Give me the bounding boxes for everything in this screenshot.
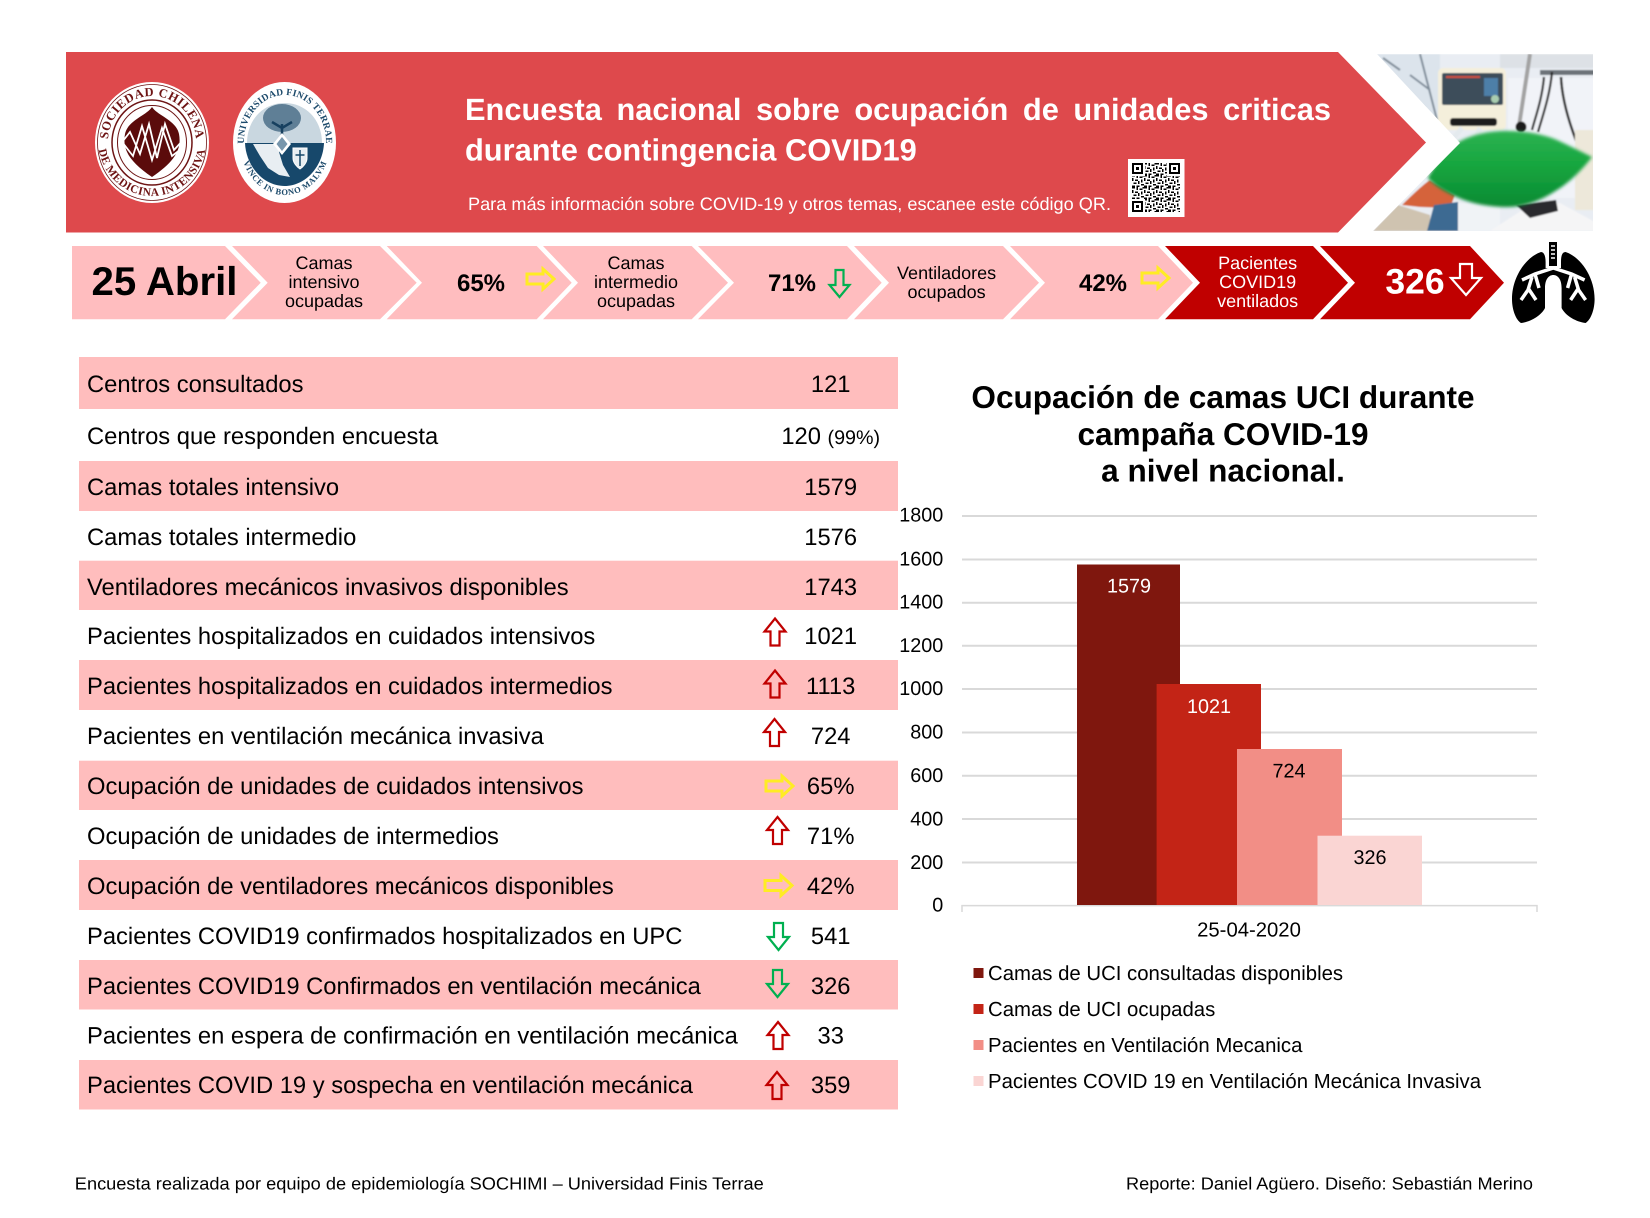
chart title (971, 379, 1475, 488)
chevron: camas intensivo label (232, 246, 417, 319)
row: Ventiladores disponibles (79, 561, 898, 610)
y axis labels: 1600 (899, 548, 943, 570)
chevron: camas intermedio label: Camas (607, 253, 665, 273)
chevron: camas intensivo label: intensivo (288, 272, 360, 292)
row: Camas totales intensivo: 1579 (804, 474, 857, 501)
y axis labels: 1000 (899, 678, 943, 700)
row: Camas totales intermedio: Camas totales intermedio (87, 524, 356, 551)
chevron: ventiladores label (854, 246, 1039, 319)
chevron: camas intensivo label: Camas (295, 253, 353, 273)
row: hospitalizados intermedios (79, 660, 898, 710)
row: ventilación mecánica invasiva: 724 (811, 723, 851, 750)
logo: Sociedad Chilena de Medicina Intensiva: DE MEDICINA INTENSIVA (98, 148, 206, 196)
logo: Sociedad Chilena de Medicina Intensiva: SOCIEDAD CHILENA (100, 88, 204, 139)
row: COVID 19 y sospecha (79, 1060, 898, 1110)
chevron: 65% (387, 246, 572, 319)
footer left credit: Encuesta realizada por equipo de epidemiología SOCHIMI – Universidad Finis Terrae (75, 1174, 764, 1194)
chevron: camas intensivo label: ocupadas (285, 291, 363, 311)
row: Centros que responden encuesta (87, 423, 880, 450)
row: COVID 19 y sospecha: 359 (811, 1072, 851, 1099)
x axis label: 25-04-2020 (1197, 920, 1301, 942)
green bag (1428, 131, 1592, 207)
row: COVID19 ventilación mecánica: 326 (811, 973, 851, 1000)
y axis labels: 600 (910, 765, 943, 787)
header subtitle: Para más información sobre COVID-19 y otros temas, escanee este código QR. (468, 194, 1111, 214)
chart title: campaña COVID-19 (1077, 416, 1369, 452)
bar: COVID 19 ventilación 326: 326 (1353, 847, 1387, 869)
legend item: camas consultadas: Camas de UCI consultadas disponibles (988, 963, 1343, 985)
row: Ventiladores disponibles: Ventiladores mecánicos invasivos disponibles (87, 574, 569, 601)
chart title: Ocupación de camas UCI durante (971, 379, 1475, 415)
row: COVID19 ventilación mecánica (79, 960, 898, 1010)
row: ocupación ventiladores: 42% (807, 873, 854, 900)
y axis labels: 1200 (899, 635, 943, 657)
row: ocupación cuidados intensivos: Ocupación de unidades de cuidados intensivos (87, 773, 584, 800)
row: Centros que responden encuesta: 120 (99%) (781, 423, 880, 450)
chevron: 71%: 71% (768, 270, 816, 297)
chevron: camas intermedio label (543, 246, 728, 319)
chevron: ventiladores label: ocupados (908, 282, 986, 302)
data table (79, 357, 898, 1110)
chevron: pacientes ventilados label: ventilados (1217, 291, 1298, 311)
row: Centros que responden encuesta: Centros que responden encuesta (87, 423, 439, 450)
bar: pacientes en ventilación 724 (1237, 749, 1342, 905)
bar: camas UCI ocupadas 1021: 1021 (1187, 696, 1231, 718)
header title (465, 92, 1331, 168)
row: ocupación ventiladores (79, 860, 898, 910)
chevron: 42%: 42% (1079, 270, 1127, 297)
row: en espera de confirmación: 33 (817, 1022, 844, 1050)
icon: lungs (1512, 242, 1595, 323)
row: hospitalizados intensivos: Pacientes hospitalizados en cuidados intensivos (87, 623, 595, 650)
QR code (1128, 159, 1184, 217)
legend item: camas ocupadas: Camas de UCI ocupadas (988, 999, 1215, 1021)
y axis labels: 800 (910, 722, 943, 744)
row: hospitalizados intensivos (87, 618, 857, 650)
y axis labels: 200 (910, 852, 943, 874)
row: ocupación cuidados intensivos: 65% (807, 773, 854, 800)
logo: Universidad Finis Terrae: VINCE IN BONO MALVM (244, 160, 326, 196)
logo: Universidad Finis Terrae: UNIVERSIDAD FINIS TERRAE (238, 88, 332, 144)
chevron: 326 (1320, 246, 1504, 319)
chevron: 71% (698, 246, 882, 319)
row: ventilación mecánica invasiva: Pacientes en ventilación mecánica invasiva (87, 723, 545, 750)
row: Centros consultados (79, 357, 898, 409)
chevron: pacientes ventilados label (1165, 246, 1348, 319)
y axis labels: 1400 (899, 592, 943, 614)
row: COVID19 hospitalizados UPC: 541 (811, 923, 851, 950)
chart title: a nivel nacional. (1101, 452, 1345, 488)
row: hospitalizados intermedios: 1113 (806, 673, 855, 700)
row: ocupación intermedios (87, 817, 854, 850)
y axis labels: 0 (932, 894, 943, 916)
row: COVID 19 y sospecha: Pacientes COVID 19 y sospecha en ventilación mecánica (87, 1072, 694, 1099)
chevron: 65%: 65% (457, 270, 505, 297)
bar: camas UCI disponibles 1579 (1077, 564, 1180, 905)
chart legend (974, 963, 1482, 1093)
header title: Encuesta nacional sobre ocupación de unidades criticas (465, 92, 1331, 127)
chevron: 326: 326 (1385, 262, 1445, 302)
row: Camas totales intensivo: Camas totales intensivo (87, 474, 339, 501)
row: Camas totales intermedio (87, 524, 857, 551)
row: ocupación intermedios: 71% (807, 823, 854, 850)
row: hospitalizados intensivos: 1021 (804, 623, 857, 650)
legend item: COVID 19 ventilación invasiva: Pacientes COVID 19 en Ventilación Mecánica Invasiva (988, 1071, 1482, 1093)
row: COVID19 ventilación mecánica: Pacientes COVID19 Confirmados en ventilación mecánica (87, 973, 702, 1000)
y axis labels (899, 504, 943, 916)
chevron: date (72, 246, 261, 319)
chevron: pacientes ventilados label: Pacientes (1218, 253, 1297, 273)
chevron: ventiladores label: Ventiladores (897, 263, 996, 283)
row: Camas totales intermedio: 1576 (804, 524, 857, 551)
row: hospitalizados intermedios: Pacientes hospitalizados en cuidados intermedios (87, 673, 613, 700)
row: Camas totales intensivo (79, 461, 898, 511)
legend item: ventilación mecanica: Pacientes en Ventilación Mecanica (988, 1035, 1303, 1057)
row: Ventiladores disponibles: 1743 (804, 574, 857, 601)
bar: COVID 19 ventilación 326 (1318, 836, 1422, 905)
chevron: pacientes ventilados label: COVID19 (1219, 272, 1296, 292)
header banner (66, 52, 1426, 232)
photo: ventilator and green bag (1370, 54, 1595, 232)
row: Centros consultados: Centros consultados (87, 371, 304, 398)
bar chart (899, 504, 1537, 942)
row: ocupación ventiladores: Ocupación de ventiladores mecánicos disponibles (87, 873, 614, 900)
logo: Universidad Finis Terrae (233, 82, 336, 203)
row: COVID19 hospitalizados UPC: Pacientes COVID19 confirmados hospitalizados en UPC (87, 923, 682, 950)
chevron: camas intermedio label: ocupadas (597, 291, 675, 311)
row: ventilación mecánica invasiva (87, 719, 851, 750)
y axis labels: 1800 (899, 504, 943, 526)
bar: camas UCI disponibles 1579: 1579 (1107, 576, 1151, 598)
chevron: camas intermedio label: intermedio (594, 272, 678, 292)
row: Centros consultados: 121 (811, 371, 851, 398)
bar: camas UCI ocupadas 1021 (1157, 684, 1261, 905)
header title: durante contingencia COVID19 (465, 133, 917, 168)
logo: Sociedad Chilena de Medicina Intensiva (95, 82, 209, 203)
footer right credit: Reporte: Daniel Agüero. Diseño: Sebastián Merino (1126, 1174, 1533, 1194)
y axis labels: 400 (910, 808, 943, 830)
row: ocupación intermedios: Ocupación de unidades de intermedios (87, 823, 499, 850)
chevron: date: 25 Abril (92, 259, 237, 304)
chevron strip (72, 246, 1504, 319)
row: en espera de confirmación: Pacientes en espera de confirmación en ventilación mecánica (87, 1022, 739, 1050)
bar: pacientes en ventilación 724: 724 (1272, 761, 1306, 783)
row: ocupación cuidados intensivos (79, 761, 898, 810)
chevron: 42% (1010, 246, 1193, 319)
